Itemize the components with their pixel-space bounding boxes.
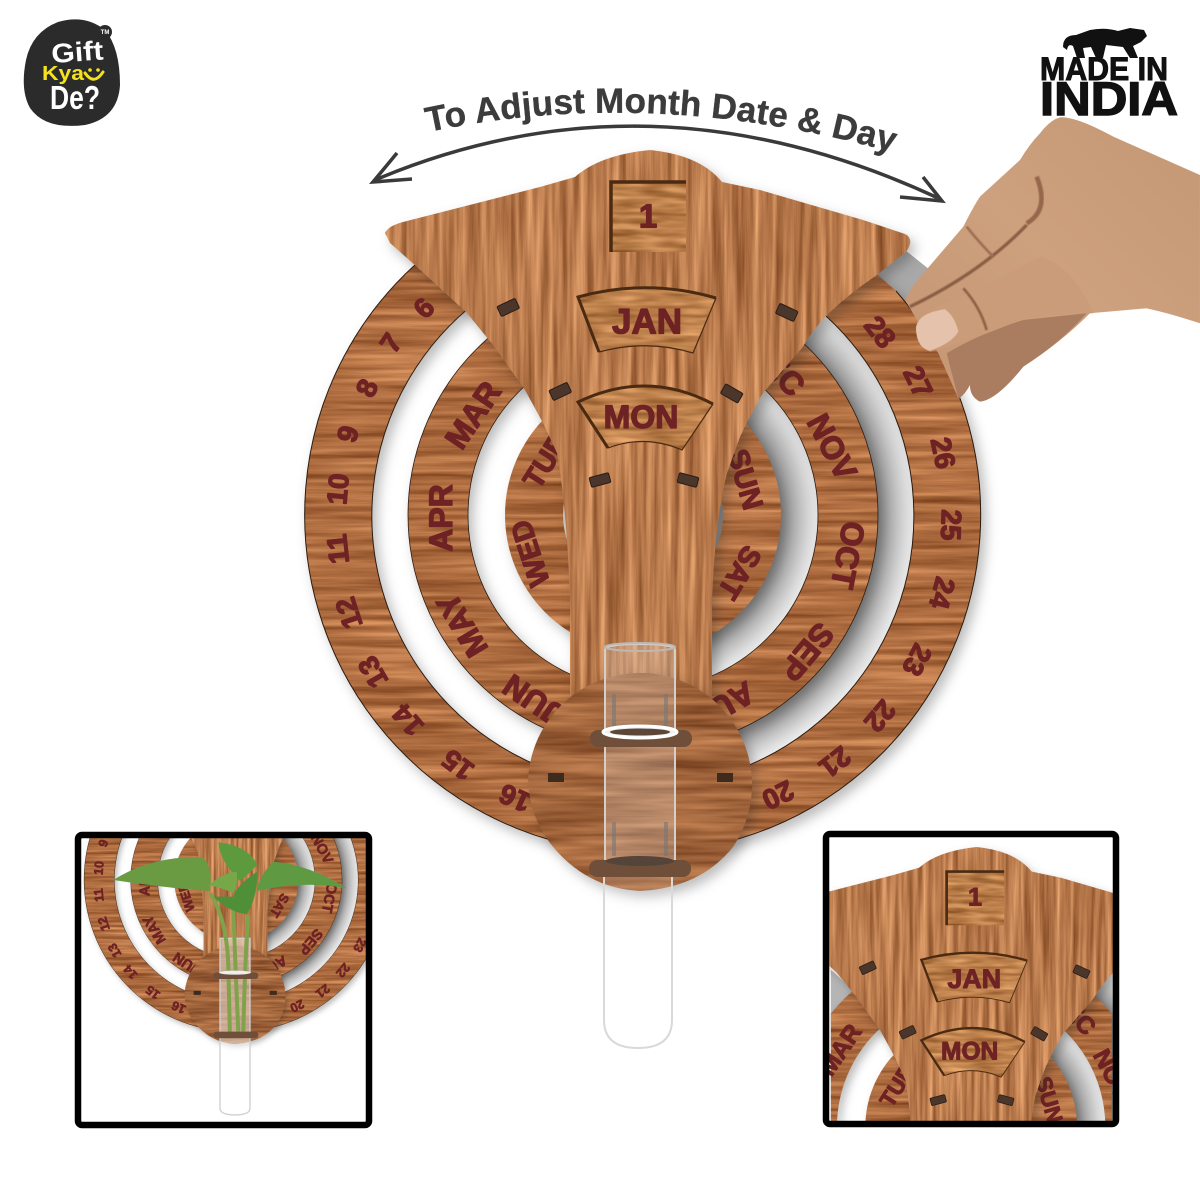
month labels: APR <box>423 484 459 552</box>
month labels: DEC <box>740 329 812 403</box>
inset calendar: APR <box>137 865 153 896</box>
month labels: SEP <box>773 616 841 688</box>
inset: vase with plant <box>74 832 372 1128</box>
inset calendar: 14 <box>121 962 140 982</box>
inset ring labels: MAR <box>814 1019 868 1081</box>
inset date window <box>947 872 1004 925</box>
date numbers: 14 <box>386 698 430 742</box>
day labels <box>505 428 768 604</box>
date numbers: 10 <box>321 472 355 506</box>
inset calendar: 11 <box>91 888 107 902</box>
window: day: MON <box>604 399 678 435</box>
inset calendar: JUN <box>170 948 203 978</box>
body: front plate <box>385 150 910 700</box>
inset: front plate close-up <box>822 830 1120 1128</box>
inset calendar: 9 <box>96 838 111 849</box>
date numbers: 24 <box>923 574 961 612</box>
date numbers: 12 <box>329 593 369 633</box>
date numbers: 11 <box>321 533 355 565</box>
date numbers: 15 <box>436 743 480 787</box>
inset day window <box>921 1028 1025 1077</box>
inset calendar <box>83 838 366 1034</box>
day labels: SUN <box>721 446 768 513</box>
date numbers: 7 <box>374 328 408 358</box>
day labels: SAT <box>711 540 767 604</box>
date numbers: 23 <box>896 639 938 681</box>
month labels: AUG <box>681 674 761 740</box>
date numbers: 28 <box>858 310 902 354</box>
inset ring labels: DEC <box>1046 985 1101 1041</box>
date numbers: 13 <box>352 651 394 693</box>
wheel: month ring <box>408 280 878 750</box>
day labels: TUE <box>517 428 575 494</box>
top collar <box>590 726 692 747</box>
month labels <box>423 329 872 740</box>
date numbers <box>321 292 967 818</box>
calendar <box>305 117 1200 1048</box>
inset frame <box>826 834 1116 1124</box>
arrow: curved double headed <box>373 126 942 201</box>
inset ring labels: NOV <box>1087 1045 1136 1105</box>
date numbers: 25 <box>935 509 967 541</box>
inset calendar: OCT <box>318 881 339 914</box>
inset calendar: 21 <box>313 981 333 1001</box>
date numbers: 22 <box>858 694 902 738</box>
pegs <box>497 298 798 487</box>
round vase plate <box>528 673 752 891</box>
inset frame <box>78 835 369 1125</box>
plate slots <box>548 773 733 782</box>
inset front plate <box>829 847 1113 1121</box>
month labels: MAR <box>438 375 508 455</box>
bottom collar <box>589 856 691 877</box>
inset month ring <box>830 992 1113 1121</box>
logo: Made in India: INDIA <box>1040 72 1178 125</box>
inset vase plate <box>185 946 285 1044</box>
month labels: JUN <box>496 667 570 733</box>
logo: Gift Kya De: Kya <box>42 63 85 85</box>
inset day window: MON <box>941 1038 998 1065</box>
inset calendar: AUG <box>254 952 289 981</box>
window: date: 1 <box>639 198 657 234</box>
window: month: JAN <box>612 302 682 342</box>
inset ring labels: TUE <box>875 1060 919 1111</box>
date numbers: 6 <box>407 292 441 324</box>
hand <box>905 117 1200 402</box>
inset calendar: SAT <box>267 891 292 920</box>
logo: Made in India <box>1040 28 1178 125</box>
inset plant and tube <box>113 842 347 1115</box>
inset day ring <box>865 1055 1084 1121</box>
month labels: NOV <box>800 408 864 487</box>
inset calendar: NOV <box>307 832 336 867</box>
logo: Gift Kya De: De? <box>50 79 100 116</box>
month labels: MAY <box>429 587 495 663</box>
wheel: day ring <box>505 377 781 653</box>
inset date window: 1 <box>968 884 982 912</box>
inset calendar: 20 <box>288 996 306 1015</box>
date numbers: 8 <box>350 374 384 402</box>
inset calendar: 22 <box>333 960 353 980</box>
wheel gap shading <box>643 244 930 786</box>
logo: Gift Kya De: TM <box>101 30 109 36</box>
month labels: OCT <box>824 518 872 592</box>
inset calendar: MAY <box>140 912 170 947</box>
logo: Made in India: MADE IN <box>1040 51 1168 87</box>
inset calendar: WED <box>174 880 198 914</box>
logo: Gift Kya De <box>24 19 120 126</box>
inset calendar: SEP <box>295 925 326 958</box>
inset calendar: 16 <box>170 998 188 1016</box>
inset gap shading <box>830 970 1113 1121</box>
date numbers: 16 <box>494 778 536 818</box>
wheel: outer date ring <box>305 257 981 853</box>
inset month window <box>921 953 1027 1003</box>
date numbers: 26 <box>925 435 961 471</box>
inset month window: JAN <box>947 964 1001 994</box>
window: month <box>578 288 716 353</box>
window: date <box>611 182 686 252</box>
window: day <box>578 386 713 450</box>
inset ring labels <box>829 1010 1113 1121</box>
date numbers: 21 <box>813 740 857 784</box>
date numbers: 20 <box>757 774 799 816</box>
date numbers: 9 <box>331 422 365 446</box>
logo: Gift Kya De: Gift <box>50 35 104 69</box>
inset calendar: 13 <box>105 941 124 960</box>
inset calendar: 23 <box>350 936 369 954</box>
inset ring labels: SUN <box>1031 1074 1068 1126</box>
inset calendar: 10 <box>92 860 107 876</box>
day labels: WED <box>505 516 557 590</box>
glass test tube <box>589 643 692 1048</box>
inset calendar: 15 <box>143 982 163 1002</box>
inset calendar: 12 <box>95 915 113 933</box>
heading: curved adjust label: To Adjust Month Date & Day <box>423 88 898 156</box>
date numbers: 27 <box>897 361 939 403</box>
